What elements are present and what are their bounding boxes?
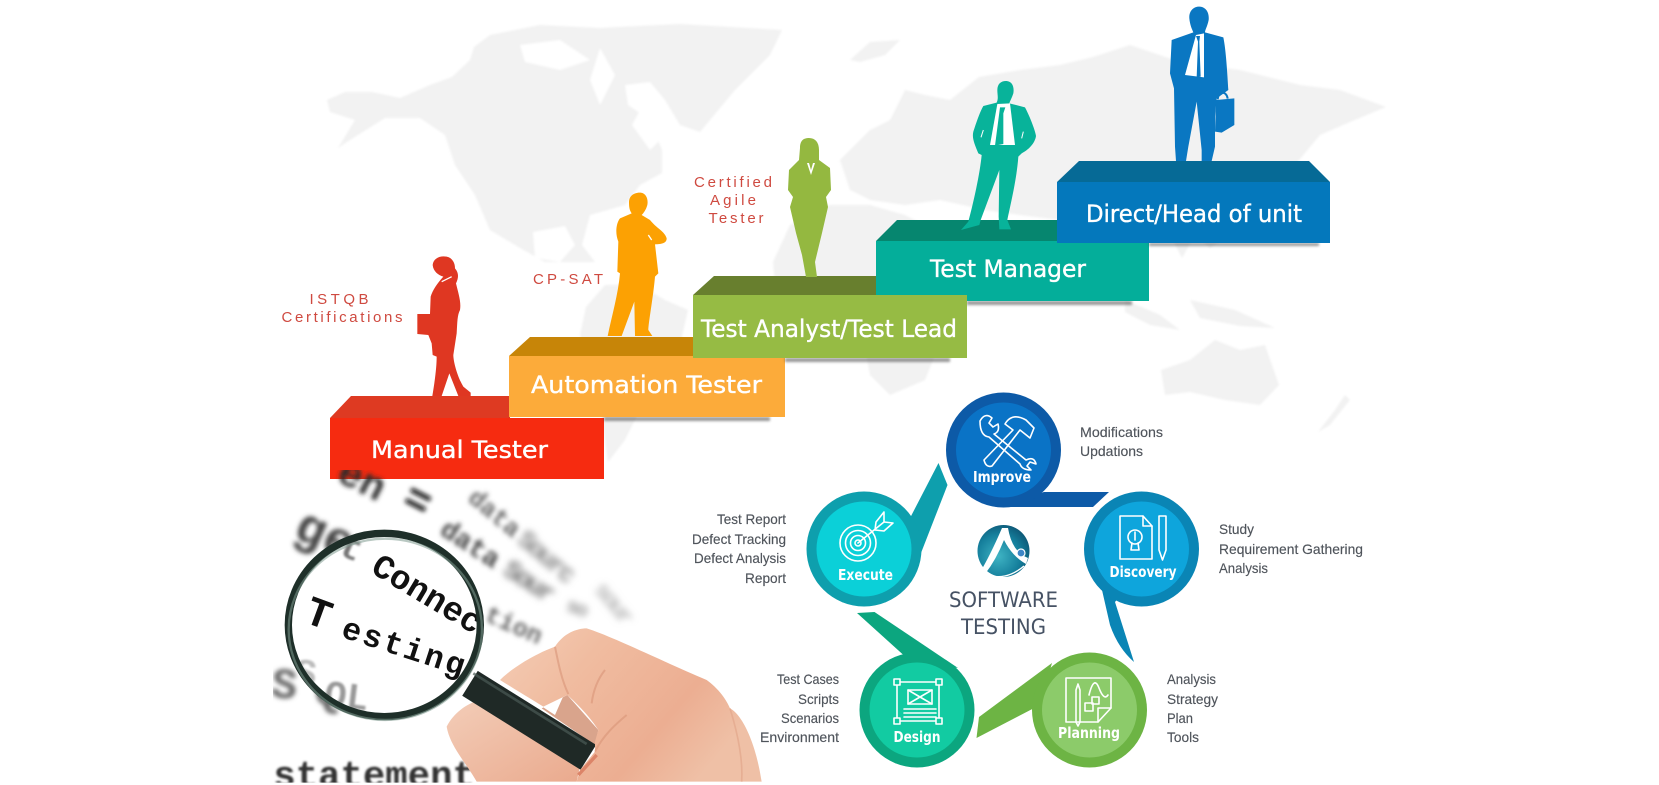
certification label: ISTQB Certifications xyxy=(282,291,402,326)
certification label: Certified Agile Tester: Certified xyxy=(694,174,772,191)
heavily blurred distant code xyxy=(500,528,634,622)
center logo xyxy=(978,525,1030,577)
labels: Planning xyxy=(1167,671,1218,745)
blurred code text: get xyxy=(285,499,391,588)
stage: Planning: Planning xyxy=(1058,724,1120,742)
stage: Improve xyxy=(946,392,1109,508)
labels: Discovery: Requirement Gathering xyxy=(1219,541,1363,557)
magnifier lens: esting xyxy=(337,612,472,686)
career step 2: Automation Tester xyxy=(509,337,785,421)
figure: teal man in suit xyxy=(961,81,1036,230)
magnifier lens: t xyxy=(332,526,369,573)
labels: Design xyxy=(760,671,839,745)
labels: Planning: Strategy xyxy=(1167,691,1218,707)
labels: Discovery: Analysis xyxy=(1219,560,1268,576)
gap between fingers xyxy=(543,696,563,715)
blurred code text: QL. xyxy=(312,669,395,725)
figure: red woman walking xyxy=(417,256,471,396)
certification label: ISTQB Certifications: ISTQB xyxy=(310,291,368,308)
labels: Planning: Tools xyxy=(1167,729,1199,745)
stage: Execute xyxy=(806,463,948,606)
certification label: Certified Agile Tester xyxy=(694,174,772,227)
world map background xyxy=(327,24,1386,462)
center title: SOFTWARE xyxy=(949,588,1058,612)
career step 4: Test Manager: Test Manager xyxy=(929,255,1086,283)
career step 2: Automation Tester: Automation Tester xyxy=(531,371,762,399)
figure: blue man with briefcase xyxy=(1170,7,1234,161)
stage: Discovery xyxy=(1084,492,1199,662)
labels: Execute: Test Report xyxy=(717,511,786,527)
magnifier handle xyxy=(470,673,588,757)
career step 4: Test Manager xyxy=(876,220,1149,305)
labels: Planning: Analysis xyxy=(1167,671,1216,687)
heavily blurred distant code: Sourc xyxy=(511,525,581,591)
back finger xyxy=(542,695,598,745)
blurred code text: data xyxy=(462,484,526,545)
stage: Execute: Execute xyxy=(838,566,893,584)
cycle: software testing xyxy=(692,392,1363,768)
labels: Design: Test Cases xyxy=(777,671,839,687)
icon: planning sheet and pencil xyxy=(1066,678,1111,726)
blurred code text: en xyxy=(329,451,392,513)
center title xyxy=(949,588,1058,639)
labels: Design: Scenarios xyxy=(781,710,839,726)
blurred code text: S xyxy=(269,662,300,713)
figure: orange man arms crossed xyxy=(608,193,667,336)
heavily blurred distant code: so xyxy=(563,595,591,624)
icon: layout frame xyxy=(894,679,942,724)
magnifier lens: T xyxy=(298,589,338,642)
certification label: Certified Agile Tester: Agile xyxy=(710,192,756,209)
labels: Execute: Defect Tracking xyxy=(692,531,786,547)
magnifier lens: Connec xyxy=(364,549,488,644)
icon: document, lightbulb and pen xyxy=(1120,516,1166,560)
career step 1: Manual Tester: Manual Tester xyxy=(371,436,548,464)
labels: Improve: Modifications xyxy=(1080,424,1163,440)
icon: wrench and hammer xyxy=(980,416,1036,470)
stage: Design xyxy=(857,612,974,768)
labels: Execute: Defect Analysis xyxy=(694,550,786,566)
labels: Improve xyxy=(1080,424,1163,459)
certification label: Certified Agile Tester: Tester xyxy=(708,210,764,227)
stage: Planning xyxy=(976,652,1147,768)
blurred code text: = xyxy=(394,475,439,531)
stage: Improve: Improve xyxy=(973,468,1031,486)
labels: Discovery: Study xyxy=(1219,521,1254,537)
labels: Discovery xyxy=(1219,521,1363,576)
icon: target and arrow xyxy=(840,512,893,561)
labels: Improve: Updations xyxy=(1080,443,1143,459)
certification label: CP-SAT: CP-SAT xyxy=(533,271,603,288)
hand holding magnifier xyxy=(447,628,762,782)
blurred code text: tion xyxy=(480,601,547,652)
magnifier lens: QL xyxy=(322,675,371,722)
career step 3: Test Analyst/Test Lead: Test Analyst/Test Lead xyxy=(700,315,957,343)
labels: Execute: Report xyxy=(745,570,786,586)
labels: Design: Scripts xyxy=(798,691,839,707)
stage: Discovery: Discovery xyxy=(1110,563,1177,581)
magnifier lens: S xyxy=(292,654,319,698)
career step 5: Direct/Head of unit xyxy=(1057,161,1330,246)
center title: TESTING xyxy=(960,615,1046,639)
certification label: ISTQB Certifications: Certifications xyxy=(282,309,402,326)
labels: Execute xyxy=(692,511,786,586)
career step 5: Direct/Head of unit: Direct/Head of unit xyxy=(1086,200,1302,228)
palm and fingers xyxy=(500,628,762,782)
blurred code text: data xyxy=(433,515,505,577)
figure: green woman xyxy=(788,138,831,277)
heavily blurred distant code: Sour xyxy=(497,556,559,611)
blurred code text xyxy=(273,470,544,718)
heavily blurred distant code: sour xyxy=(587,578,637,631)
labels: Planning: Plan xyxy=(1167,710,1193,726)
photo: magnifying glass over code with hand xyxy=(269,451,637,785)
career step 3: Test Analyst/Test Lead xyxy=(693,276,967,362)
stage: Design: Design xyxy=(894,728,940,746)
magnifier lens xyxy=(288,526,488,722)
labels: Design: Environment xyxy=(760,729,839,745)
thumb xyxy=(447,700,580,782)
career step 1: Manual Tester xyxy=(330,396,604,479)
